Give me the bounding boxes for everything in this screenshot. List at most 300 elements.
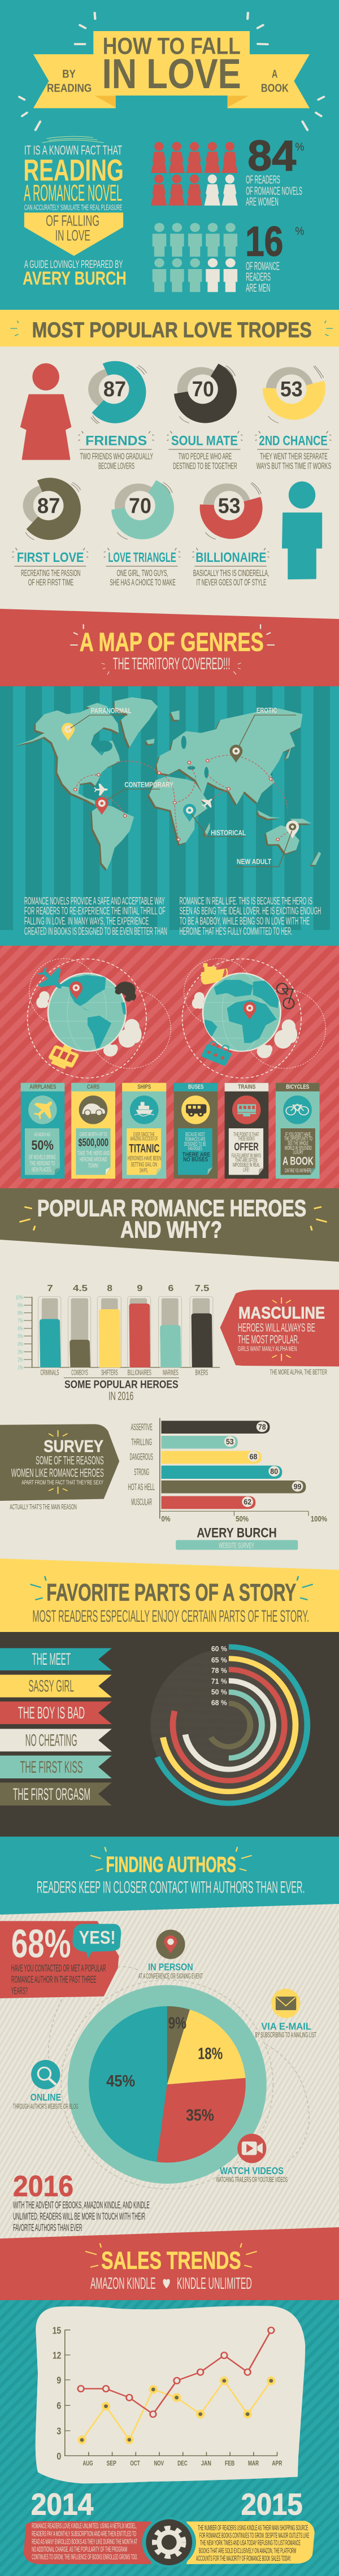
bar chart: popular heroes: 3%	[18, 1349, 23, 1356]
tropes section bottom: RECREATING THE PASSION	[21, 568, 80, 578]
card: bicycles	[276, 1083, 320, 1179]
line chart: APR	[272, 2460, 282, 2467]
icon: steam train	[201, 1039, 234, 1066]
bar chart: survey: 68	[250, 1452, 257, 1461]
card: cars: TOWN!	[88, 1162, 98, 1169]
stat: 16 percent: READERS	[246, 270, 271, 283]
icon: car	[112, 978, 143, 1004]
chart card	[36, 2306, 305, 2483]
card: ships: EVER SINCE THE	[133, 1132, 155, 1138]
background: heroes cream panel	[0, 1188, 339, 1573]
title text	[47, 33, 289, 97]
bar chart: popular heroes: BIKERS	[195, 1368, 208, 1377]
callout: survey	[0, 1424, 119, 1501]
panel: 2014 note	[24, 2521, 151, 2564]
online: ONLINE	[31, 2092, 61, 2103]
authors section: ROMANCE AUTHOR IN THE PAST THREE	[11, 1974, 96, 1985]
donut: 2nd chance 53: 53	[280, 377, 303, 401]
pie chart	[68, 1985, 267, 2184]
donut: billionaire 53: 53	[218, 493, 241, 518]
bar chart: popular heroes: 4%	[18, 1341, 23, 1348]
header section: A ROMANCE NOVEL	[24, 180, 122, 206]
card: bicycles: LUXURY	[293, 1149, 303, 1155]
bar chart: popular heroes: MARINES	[163, 1368, 179, 1377]
bar: billionaires	[128, 1296, 151, 1367]
stat: 16 percent	[245, 218, 304, 295]
pin: erotic	[229, 744, 242, 763]
icon: ship	[201, 963, 227, 985]
ribbon: no cheating	[0, 1729, 112, 1751]
label: billionaire: BILLIONAIRE	[195, 551, 266, 565]
clouds: left globe	[36, 991, 142, 1057]
stat: 84 percent: ARE WOMEN	[246, 195, 279, 208]
icon: plane	[37, 966, 63, 989]
line chart: JAN	[201, 2460, 211, 2467]
donut: soul mate 70	[174, 363, 237, 423]
intro text block: OF FALLING	[46, 213, 99, 230]
sales chart and notes: NO ADDITIONAL CHARGE. AS THE POPULARITY OF THE PROGRAM	[32, 2545, 127, 2554]
background: map panel	[0, 686, 339, 939]
callout: survey: SURVEY	[44, 1436, 103, 1456]
bar chart: survey: 62	[244, 1498, 251, 1506]
background: transport striped red panel	[0, 946, 339, 1188]
bar chart: survey: STRONG	[134, 1466, 149, 1477]
pie chart: 35%	[186, 2106, 214, 2124]
globe: africa	[182, 959, 325, 1078]
callout: survey: APART FROM THE FACT THAT THEY'RE SEXY	[21, 1480, 103, 1486]
bar chart: popular heroes: 2%	[18, 1357, 23, 1363]
card: bicycles: A BOOK	[282, 1155, 314, 1167]
donut: love triangle 70	[111, 480, 174, 539]
icon: train	[46, 1042, 81, 1071]
line chart: SEP	[107, 2460, 116, 2467]
subheading: the territory covered	[102, 654, 241, 674]
card: bicycles: BICYCLES	[286, 1083, 309, 1090]
bar chart: survey: 78	[258, 1423, 266, 1432]
in person	[138, 1930, 203, 1980]
heading: finding authors: FINDING AUTHORS	[106, 1852, 236, 1877]
background: heroes olive band	[0, 1188, 339, 1262]
heading: popular romance heroes: AND WHY?	[120, 1216, 222, 1243]
title text: BY	[62, 68, 76, 80]
via e-mail	[255, 1989, 316, 2039]
card: ships: SHIPS	[137, 1083, 151, 1090]
sunburst rays	[19, 13, 324, 130]
map labels: HISTORICAL	[211, 829, 246, 837]
donut: soul mate 70: 70	[192, 377, 214, 401]
bar chart: popular heroes: 9%	[18, 1302, 23, 1309]
bar chart: popular heroes: SOME POPULAR HEROES	[64, 1379, 179, 1391]
ribbon: sassy girl	[0, 1675, 112, 1698]
bar: shifters	[97, 1296, 121, 1367]
label: watch videos: WATCH VIDEOS	[220, 2165, 284, 2177]
ribbon: sassy girl: SASSY GIRL	[29, 1677, 74, 1695]
bar chart: survey: THRILLING	[131, 1437, 152, 1447]
survey source	[176, 1526, 298, 1550]
title text: BOOK	[261, 82, 289, 94]
donut: 2nd chance 53	[263, 366, 325, 423]
card: airplanes: THE HEROINE TO	[29, 1159, 55, 1167]
transport section: FALLING IN LOVE. IN MANY WAYS, THE EXPERIENCE	[24, 916, 149, 927]
radial chart	[150, 1645, 307, 1803]
story section	[0, 1511, 327, 1806]
bar chart: survey: 80	[270, 1467, 278, 1476]
series: red line	[78, 2327, 274, 2417]
card: trains: THESE BOOKS	[238, 1136, 255, 1142]
bar: criminals	[38, 1296, 61, 1367]
card: trains: IMPOSSIBLE IN REAL	[233, 1162, 260, 1168]
line chart: 3	[56, 2426, 61, 2437]
icon: gear	[142, 2517, 196, 2568]
card: airplanes: NEW PLACES.	[32, 1166, 52, 1173]
clouds: right globe	[192, 992, 297, 1058]
bar chart: popular heroes: 1%	[18, 1365, 23, 1371]
header section	[19, 13, 324, 295]
intro text block: IT IS A KNOWN FACT THAT	[24, 143, 122, 158]
bar chart: popular heroes: 6%	[18, 1326, 23, 1332]
pie chart: 45%	[106, 2072, 135, 2090]
label: first love: OF HER FIRST TIME	[28, 577, 73, 587]
card: buses: NO BUSES	[183, 1155, 208, 1163]
pie chart: 18%	[198, 2045, 223, 2063]
survey axis: 100%	[311, 1515, 327, 1523]
bar values: 7	[47, 1283, 53, 1293]
label: friends: BECOME LOVERS	[98, 460, 134, 471]
panel: 2015 note	[186, 2521, 315, 2564]
authors section	[0, 1921, 316, 2189]
bar chart: popular heroes	[16, 1295, 220, 1402]
donut: friends 87	[88, 361, 146, 424]
bar values: 8	[107, 1283, 112, 1293]
card: airplanes: AS MUCH AS	[34, 1132, 50, 1138]
tropes section bottom: DESTINED TO BE TOGETHER	[173, 460, 237, 471]
map section	[15, 654, 321, 871]
bar chart: popular heroes: CRIMINALS	[41, 1368, 59, 1377]
card: buses: ROMANCES ARE	[185, 1136, 206, 1142]
heading: sales trends: SALES TRENDS	[101, 2246, 241, 2274]
card: ships	[122, 1083, 166, 1179]
line chart: AUG	[83, 2460, 93, 2467]
callout: 68 percent	[0, 1921, 121, 1998]
speech bubble: yes: YES!	[79, 1928, 116, 1948]
bar chart: survey: ASSERTIVE	[131, 1422, 153, 1432]
map labels: NEW ADULT	[237, 858, 272, 865]
title text: HOW TO FALL	[103, 33, 241, 59]
card: ships: SETTING SAIL ON	[131, 1161, 157, 1168]
card: buses: BUSES	[188, 1083, 203, 1090]
label: love triangle	[104, 548, 180, 587]
survey axis: 50%	[236, 1515, 249, 1523]
men pictogram	[153, 223, 237, 292]
card: airplanes: OF NOVELS BRING	[29, 1153, 56, 1161]
heading: sales trends	[85, 2243, 257, 2293]
ribbon: no cheating: NO CHEATING	[25, 1730, 77, 1750]
radial chart: 78 %	[211, 1666, 227, 1675]
icon: map plane east	[201, 799, 212, 808]
pin: contemporary	[95, 797, 108, 815]
map labels: EROTIC	[257, 707, 277, 715]
icon: bicycle	[277, 984, 294, 1008]
card: trains: FULFILLMENT IN WAYS	[232, 1153, 261, 1159]
card: trains: LIFE!	[243, 1167, 249, 1173]
intro text block	[23, 136, 127, 289]
world map	[15, 697, 321, 871]
card: cars	[71, 1083, 115, 1179]
paragraph: left column	[24, 895, 167, 937]
intro text block: IN LOVE	[55, 227, 90, 244]
year: 2014: 2014	[31, 2488, 93, 2521]
label: billionaire	[193, 548, 269, 587]
background: story yellow band	[0, 1558, 339, 1632]
paragraph: right column	[180, 895, 321, 937]
bar chart: popular heroes: SHIFTERS	[101, 1368, 118, 1377]
card: ships: TITANIC	[129, 1141, 159, 1155]
line chart: 12	[53, 2350, 61, 2361]
intro text block: READING	[23, 154, 124, 187]
transport cards and heroes heading	[19, 1083, 327, 1293]
heading: favorite parts of a story	[31, 1576, 313, 1626]
ribbon: the first kiss	[0, 1756, 112, 1778]
card: airplanes	[21, 1083, 64, 1179]
bar chart: survey: DANGEROUS	[130, 1452, 153, 1462]
line chart: FEB	[225, 2460, 234, 2467]
donut: billionaire 53	[200, 482, 263, 539]
pie chart: 9%	[168, 2014, 186, 2032]
label: love triangle: LOVE TRIANGLE	[108, 551, 176, 565]
stat: 16 percent: ARE MEN	[246, 281, 270, 295]
ribbon: the first orgasm: THE FIRST ORGASM	[13, 1785, 90, 1803]
icon: map plane west	[92, 782, 108, 797]
bar chart: survey: MUSCULAR	[131, 1497, 152, 1507]
background: sales red band	[0, 2227, 339, 2300]
pin: new adult	[286, 820, 299, 838]
survey source: WEBSITE SURVEY	[219, 1541, 254, 1550]
background: sales striped teal panel	[0, 2295, 339, 2576]
label: first love: FIRST LOVE	[17, 551, 84, 565]
ribbon: the boy is bad: THE BOY IS BAD	[18, 1703, 85, 1722]
map labels: PARANORMAL	[91, 707, 132, 715]
pin: historical	[183, 804, 196, 822]
background: authors teal band	[0, 1837, 339, 1915]
transport cards and heroes heading: HEROINES HAVE BEEN	[128, 1154, 161, 1162]
line chart: 15	[53, 2325, 61, 2336]
card: buses: THERE ARE	[182, 1151, 210, 1158]
map labels: CONTEMPORARY	[124, 781, 173, 789]
card: trains: THE POINT IS THAT	[233, 1132, 259, 1138]
survey axis	[160, 1511, 327, 1523]
card: buses: DESIGNED TO BE	[184, 1141, 206, 1148]
donut: love triangle 70: 70	[129, 493, 151, 518]
series: yellow line	[77, 2376, 275, 2444]
stat: 84 percent: OF READERS	[246, 173, 280, 186]
line chart: MAR	[248, 2460, 259, 2467]
stat: 16 percent: OF ROMANCE	[246, 259, 280, 272]
icon: man	[282, 482, 321, 579]
title text: READING	[47, 82, 92, 94]
card: trains	[225, 1083, 268, 1179]
heading: popular romance heroes	[19, 1195, 327, 1243]
card: cars: $500,000	[79, 1137, 108, 1149]
line chart: DEC	[177, 2460, 188, 2467]
via e-mail: VIA E-MAIL	[261, 2021, 311, 2032]
heroes section	[0, 1290, 339, 1519]
sales chart and notes: READERS PAY A MONTHLY SUBSCRIPTION AND ARE THEN ENTITLED TO	[32, 2530, 136, 2538]
speech bubble: yes	[72, 1924, 121, 1959]
ribbon: the boy is bad	[0, 1702, 112, 1724]
stat: 16 percent: %	[295, 225, 304, 237]
in person: IN PERSON	[148, 1962, 193, 1973]
background: genres red band	[0, 609, 339, 686]
heading: sales trends: AMAZON KINDLE	[90, 2274, 156, 2292]
label: soul mate	[167, 431, 242, 471]
card: buses: BECAUSE MOST	[185, 1132, 205, 1138]
text: 2016: FAVORITE AUTHORS THAN EVER	[13, 2222, 82, 2233]
line chart: 0	[56, 2451, 61, 2462]
authors section: HAVE YOU CONTACTED OR MET A POPULAR	[11, 1963, 106, 1974]
line chart	[53, 2325, 282, 2467]
tropes section top	[10, 318, 333, 460]
header section: CAN ACCURATELY SIMULATE THE REAL PLEASURE	[24, 204, 122, 212]
background: authors striped panel	[0, 1899, 339, 2250]
bar chart: popular heroes: 8%	[18, 1310, 23, 1317]
bar: cowboys	[68, 1296, 91, 1367]
bar chart: survey: 99	[294, 1482, 301, 1491]
title text: IN LOVE	[102, 50, 241, 97]
bar chart: popular heroes: COWBOYS	[71, 1368, 88, 1377]
online	[13, 2060, 79, 2110]
donut: first love 87	[23, 478, 81, 540]
bar chart: survey	[128, 1418, 306, 1519]
bar: bikers	[190, 1296, 213, 1367]
globe: americas	[28, 959, 171, 1078]
survey source: AVERY BURCH	[197, 1526, 277, 1540]
donut: first love 87: 87	[37, 493, 60, 518]
card: cars: CARS	[87, 1083, 99, 1090]
heading: finding authors	[37, 1847, 305, 1897]
label: watch videos	[216, 2165, 288, 2184]
map labels	[70, 707, 296, 867]
callout: 68 percent: 68%	[11, 1922, 71, 1966]
icon: woman	[21, 363, 71, 460]
line chart: 6	[56, 2400, 61, 2412]
background: tropes cream panel	[0, 347, 339, 624]
ribbon: the first orgasm	[0, 1782, 112, 1806]
header section: A GUIDE LOVINGLY PREPARED BY	[24, 258, 123, 271]
sales chart and notes: ROMANCE READERS LOVE KINDLE UNLIMITED. USING A NETFLIX MODEL,	[32, 2522, 137, 2530]
dashed orbit lines	[49, 1967, 309, 2189]
sales heading	[13, 2165, 305, 2483]
watch videos icon	[237, 2134, 266, 2163]
label: soul mate: SOUL MATE	[171, 434, 238, 448]
card: airplanes: AIRPLANES	[29, 1083, 56, 1090]
bar chart: popular heroes: IN 2016	[108, 1389, 133, 1402]
line chart: 9	[56, 2375, 61, 2386]
stat: 84 percent	[246, 132, 304, 208]
map route dots	[73, 759, 279, 841]
bar chart: popular heroes: 5%	[18, 1334, 23, 1340]
card: cars: TAKE THE HERO AND	[77, 1149, 110, 1157]
card: buses: FANTASIES	[188, 1146, 202, 1152]
label: soul mate: TWO PEOPLE WHO ARE	[179, 451, 232, 461]
bar chart: popular heroes: 10%	[16, 1295, 23, 1301]
label: love triangle: ONE GIRL, TWO GUYS,	[117, 568, 168, 578]
stat: 84 percent: 84	[247, 132, 297, 180]
bar chart: popular heroes: BILLIONAIRES	[128, 1368, 151, 1377]
year: 2015: 2015	[241, 2488, 303, 2521]
stat: 84 percent: %	[295, 141, 304, 153]
radial chart: 60 %	[211, 1645, 227, 1653]
transport section	[24, 895, 325, 1078]
card: buses	[174, 1083, 218, 1179]
callout: masculine	[220, 1290, 339, 1366]
line chart: OCT	[130, 2460, 140, 2467]
background: story dark panel	[0, 1632, 339, 1837]
background: header teal	[0, 0, 339, 310]
heroes section: WOMEN LIKE ROMANCE HEROES	[11, 1466, 104, 1479]
tropes section bottom: SHE HAS A CHOICE TO MAKE	[110, 577, 176, 587]
card: cars: CARS WORTH UP TO	[80, 1132, 107, 1138]
bar: marines	[158, 1296, 181, 1367]
intro text block: AVERY BURCH	[23, 268, 127, 289]
card: ships: SHIPS.	[140, 1167, 148, 1174]
ribbon: the meet: THE MEET	[32, 1649, 71, 1668]
label: friends: FRIENDS	[85, 434, 147, 448]
bar values: 6	[168, 1283, 173, 1293]
authors section: AT A CONFERENCE OR SIGNING EVENT	[138, 1972, 203, 1980]
title ribbon	[33, 31, 310, 108]
heroes section: ACTUALLY THAT'S THE MAIN REASON	[10, 1503, 77, 1512]
radial chart: 71 %	[211, 1677, 227, 1686]
card: cars: HEROINE AROUND	[80, 1155, 107, 1163]
radial chart: 68 %	[211, 1699, 227, 1707]
bar values: 7.5	[194, 1283, 210, 1293]
card: airplanes: 50%	[31, 1138, 54, 1153]
text: 2016	[13, 2170, 150, 2233]
title text: A	[272, 68, 277, 80]
label: friends	[79, 431, 154, 471]
bar values	[47, 1283, 210, 1293]
women pictogram	[151, 142, 238, 206]
card: trains: OFFER	[234, 1141, 259, 1153]
tropes section bottom: TWO FRIENDS WHO GRADUALLY	[80, 451, 153, 461]
bar chart: survey: 53	[226, 1438, 234, 1447]
line chart: NOV	[154, 2460, 164, 2467]
label: first love	[12, 548, 88, 587]
ribbon: the first kiss: THE FIRST KISS	[20, 1757, 83, 1776]
sales chart and notes: READ AS MANY ENROLLED BOOKS AS THEY LIKE DURING THE MONTH AT	[32, 2538, 137, 2546]
map routes	[75, 755, 291, 839]
pin: paranormal	[62, 723, 75, 741]
card: trains: THAT ARE OFTEN	[235, 1157, 257, 1163]
radial chart: 50 %	[211, 1688, 227, 1696]
bar values: 9	[137, 1283, 143, 1293]
ribbon: the meet	[0, 1648, 112, 1670]
donut: friends 87: 87	[103, 377, 126, 401]
heading: a map of genres	[70, 624, 275, 657]
bar values: 4.5	[73, 1283, 88, 1293]
card: trains: TRAINS	[238, 1083, 255, 1090]
tropes section bottom	[12, 431, 331, 657]
transport cards and heroes heading: AMAZING SUCCESS OF	[130, 1136, 158, 1142]
callout: 68 percent: YEARS?	[11, 1985, 28, 1997]
text: 2016: 2016	[13, 2170, 73, 2202]
authors heading	[37, 1847, 305, 1897]
authors section: THROUGH AUTHOR'S WEBSITE OR BLOG	[13, 2103, 79, 2110]
radial chart: 65 %	[211, 1656, 227, 1665]
bar chart: popular heroes: 7%	[18, 1318, 23, 1324]
callout: survey: SOME OF THE REASONS	[36, 1453, 104, 1467]
background: tropes yellow band	[0, 310, 339, 347]
